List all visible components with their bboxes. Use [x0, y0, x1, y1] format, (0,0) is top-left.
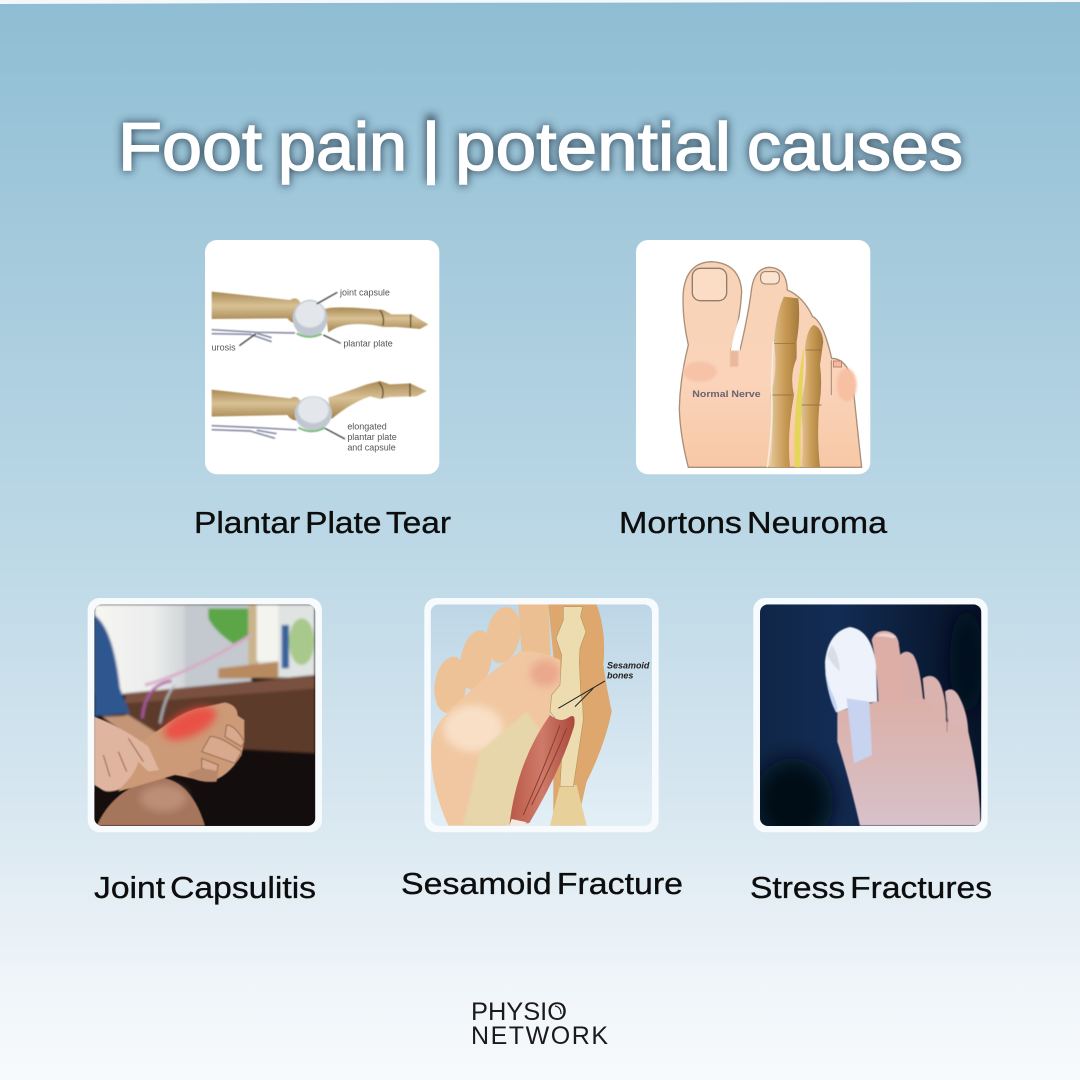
panel: sesamoid fracture [401, 598, 683, 901]
image: plantar plate diagram: and capsule [347, 443, 396, 453]
logo: physio network: NETWORK [471, 1022, 608, 1050]
title: causes [747, 109, 963, 185]
foot body [837, 698, 981, 826]
title: pain [278, 109, 407, 185]
title: potential [455, 109, 731, 185]
panel: plantar plate tear [194, 240, 451, 540]
label: stress fractures: Stress Fractures [750, 870, 992, 905]
title: | [421, 109, 441, 185]
title: pain [278, 109, 407, 185]
title: causes [747, 109, 963, 185]
label: plantar plate tear: Plantar Plate Tear [194, 505, 451, 540]
image: plantar plate diagram: elongated [347, 421, 387, 431]
muscle [509, 715, 575, 826]
title: Foot [118, 109, 262, 185]
title: potential [455, 109, 731, 185]
dressing [825, 627, 877, 712]
panel: joint capsulitis [88, 598, 322, 905]
logo: physio network [471, 998, 608, 1050]
title [118, 109, 963, 185]
sole [548, 604, 612, 826]
label: mortons neuroma: Mortons Neuroma [619, 505, 888, 540]
label: joint capsulitis: Joint Capsulitis [94, 870, 316, 905]
title: Foot [118, 109, 262, 185]
image: plantar plate diagram: urosis [212, 343, 236, 353]
panel: stress fractures [750, 598, 992, 905]
image: plantar plate diagram: plantar plate [343, 339, 393, 349]
label: sesamoid fracture: Sesamoid Fracture [401, 866, 683, 901]
image: plantar plate diagram: plantar plate [347, 432, 397, 442]
image: sole of foot anatomy: Sesamoid [607, 660, 650, 670]
logo: physio network: PHYSIO [471, 998, 567, 1026]
icon: swoosh in O [555, 1006, 561, 1014]
image: sole of foot anatomy [424, 598, 659, 832]
image: sole of foot anatomy: bones [607, 670, 633, 680]
toes [434, 656, 466, 714]
image: bandaged toe photo [753, 598, 988, 845]
image: foot nerve diagram [636, 240, 870, 474]
image: foot nerve diagram: Normal Nerve [692, 389, 761, 399]
image: plantar plate diagram: joint capsule [339, 287, 390, 297]
panel: mortons neuroma [619, 240, 888, 540]
image: plantar plate diagram [205, 240, 439, 474]
toes [872, 631, 907, 702]
bones [550, 607, 586, 787]
image: photo of inflamed toe joint [88, 598, 322, 832]
